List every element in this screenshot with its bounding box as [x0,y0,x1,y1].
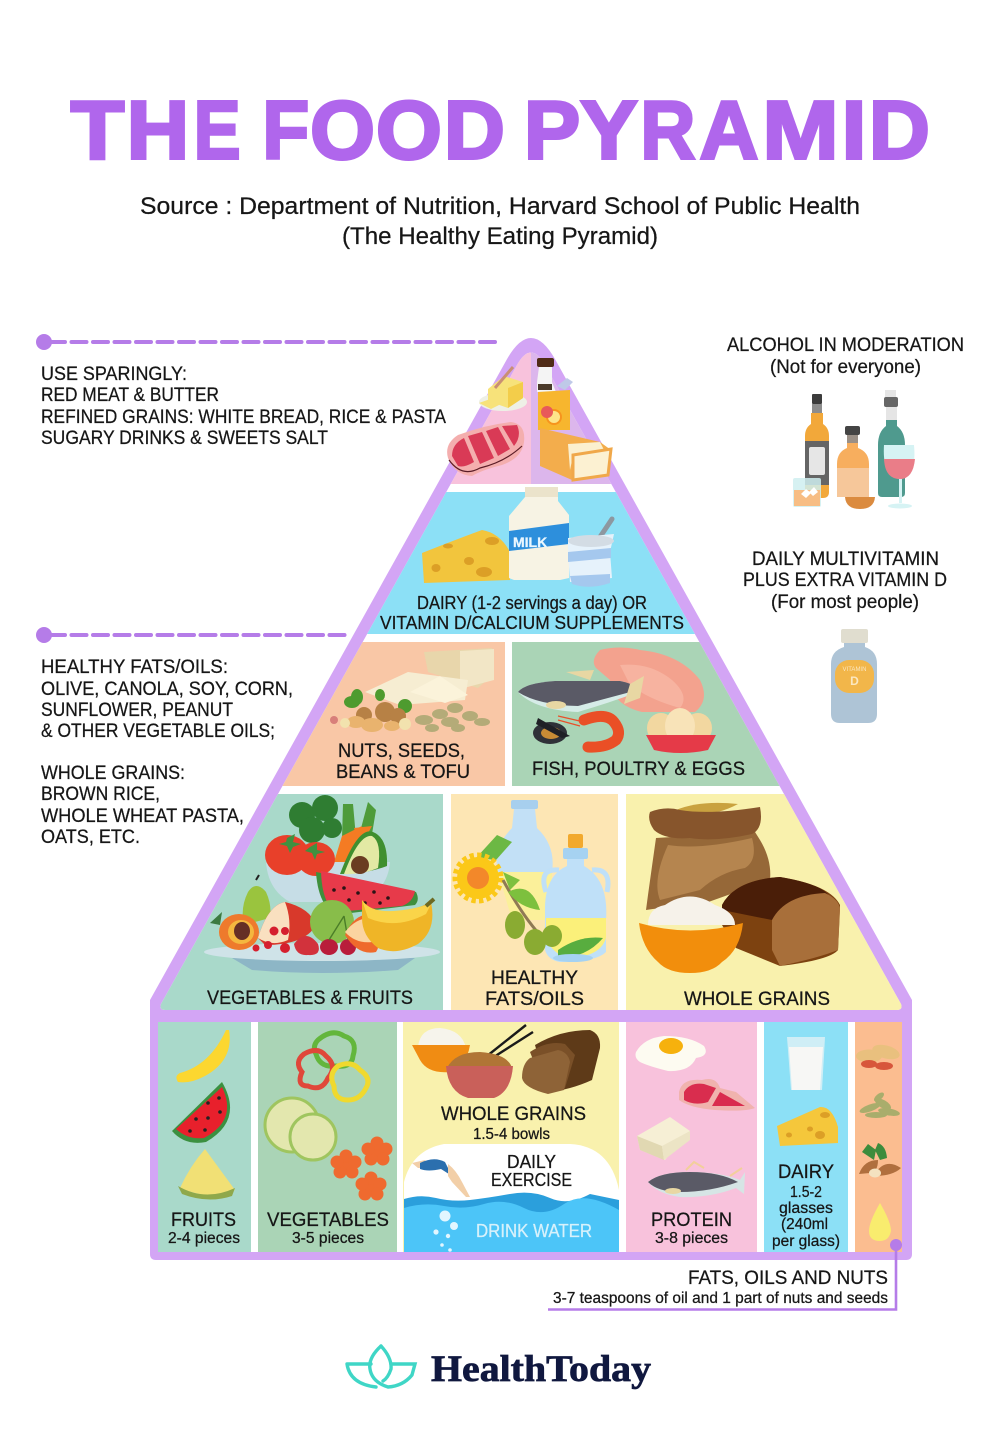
text block: healthy fats and oils: HEALTHY FATS/OILS: [41,656,228,678]
panel: whole grains [626,794,916,1010]
subtitle: source: Source : Department of Nutrition, Harvard School of Public Health [140,193,860,220]
icon: bowl of grains with chopsticks [446,1025,533,1098]
title: D [444,84,505,176]
text: drink water label: DRINK WATER [476,1221,592,1241]
icon: vitamin bottle: D [850,674,859,688]
text: vegetables label: VEGETABLES [267,1209,389,1231]
bottom tier white background [158,1022,902,1252]
icon: pineapple slice [178,1149,235,1200]
icon: sliced bell peppers [298,1033,368,1100]
icon: raw meat [679,1079,755,1111]
text block: use sparingly: REFINED GRAINS: WHITE BREAD, RICE & PASTA [41,406,446,428]
text block: healthy fats and oils [41,656,293,742]
illustration: bowl of vegetables [265,795,390,902]
icon: watermelon slice [172,1082,230,1143]
text block: whole grains [41,762,244,848]
illustration: raw steak [447,422,524,476]
panel: nuts, seeds, beans and tofu [270,642,505,786]
text block: whole grains: BROWN RICE, [41,783,160,805]
illustration: butter on a plate [479,367,527,411]
text block: use sparingly: SUGARY DRINKS & SWEETS SALT [41,427,328,449]
illustration: sunflower [457,835,512,899]
panel: whole grains servings [403,1022,619,1252]
text: fruits label: 2-4 pieces [168,1230,240,1247]
icon: almonds and leaves [859,1143,901,1178]
text: vegetables and fruits label: VEGETABLES & FRUITS [207,987,413,1009]
title: D [869,84,930,176]
text: whole grains label: WHOLE GRAINS [684,988,830,1010]
icon: carrot slices [330,1136,392,1200]
illustration: plate of fruits [204,871,440,973]
text: vegetables label: 3-5 pieces [292,1230,364,1247]
icon: fried egg [636,1036,706,1071]
text: dairy serving label: 1.5-2 [790,1184,822,1201]
icon: banana [176,1030,230,1082]
icon: cheese [777,1107,838,1146]
illustration: milk carton: MILK [513,534,547,550]
text: whole grains serving label: WHOLE GRAINS [441,1103,586,1125]
text block: daily multivitamin: PLUS EXTRA VITAMIN D [743,569,947,591]
callout line: healthy foods [36,627,345,643]
text: fruits label: FRUITS [171,1209,236,1231]
text block: whole grains: WHOLE GRAINS: [41,762,185,784]
text block: alcohol in moderation [727,334,964,378]
icon: bubbles [433,1210,458,1252]
icon: cucumber slices [265,1098,336,1160]
illustration: sliced white bread [540,428,611,480]
text block: daily multivitamin [743,548,947,613]
icon: alcohol bottles and glasses [793,390,915,509]
illustration: milk carton [509,487,569,580]
illustration: yogurt cup with spoon [568,519,614,587]
callout line: use sparingly [36,334,497,350]
text: healthy fats and oils label: FATS/OILS [485,988,584,1010]
text: nuts tier label: BEANS & TOFU [336,761,470,783]
illustration: daily exercise and water [404,1144,619,1252]
title: M [762,84,839,176]
callout: fats, oils and nuts connector [548,1239,902,1310]
text block: alcohol in moderation: (Not for everyone) [770,356,921,378]
icon: oil drop [869,1203,891,1241]
text: dairy serving label [772,1161,840,1250]
illustration: bowl of eggs [646,708,716,753]
text: fats, oils and nuts: FATS, OILS AND NUTS [688,1267,888,1289]
panel: fruits servings [158,1022,251,1252]
logo: lotus icon [347,1346,415,1387]
text block: daily multivitamin: DAILY MULTIVITAMIN [752,548,939,570]
title: A [700,84,758,176]
text: dairy serving label: glasses [779,1200,833,1217]
panel: dairy tier [360,492,705,634]
text block: use sparingly: RED MEAT & BUTTER [41,384,219,406]
illustration: olives and leaves [503,872,603,962]
text: nuts tier label: NUTS, SEEDS, [338,740,465,762]
text block: use sparingly: USE SPARINGLY: [41,363,187,385]
title: H [127,84,189,176]
panel: dairy servings [764,1022,848,1252]
illustration: oil jug [544,834,608,962]
icon: diver [412,1159,470,1197]
text: vegetables label [267,1209,389,1247]
text: nuts tier label [336,740,470,783]
text: daily exercise label [491,1152,572,1190]
panel: vegetables and fruits [150,794,443,1010]
text: fats, oils and nuts: 3-7 teaspoons of oil and 1 part of nuts and seeds [553,1290,888,1307]
illustration: salt bottle [537,358,556,392]
icon: vitamin bottle: VITAMIN [843,667,866,673]
illustration: grey fish [518,670,644,712]
icon: vitamin bottle [831,629,877,723]
title: O [310,84,375,176]
text block: whole grains: OATS, ETC. [41,826,140,848]
text block: daily multivitamin: (For most people) [771,591,919,613]
icon: seeds [858,1091,900,1118]
text: dairy serving label: (240ml [781,1216,828,1233]
panel: fats and nuts servings [855,1022,902,1252]
illustration: oil bottle [497,800,553,920]
text block: alcohol in moderation: ALCOHOL IN MODERATION [727,334,964,356]
text: protein label: PROTEIN [651,1209,732,1231]
text: protein label: 3-8 pieces [655,1230,728,1247]
text: protein label [651,1209,732,1247]
pyramid outline [150,338,912,1260]
text block: healthy fats and oils: OLIVE, CANOLA, SOY, CORN, [41,678,293,700]
text: fats, oils and nuts [553,1267,888,1307]
title: T [71,84,124,176]
title: R [640,84,695,176]
panel: top tier, use sparingly [450,352,611,484]
text: fruits label [168,1209,240,1247]
text: daily exercise label: DAILY [507,1152,556,1172]
subtitle: source [140,193,860,250]
text: dairy serving label: per glass) [772,1233,840,1250]
pyramid inner background [160,352,902,1010]
text block: whole grains: WHOLE WHEAT PASTA, [41,805,244,827]
text: healthy fats and oils label [485,967,584,1010]
title: E [194,84,241,176]
illustration: mussel [533,718,570,744]
illustration: juice box [538,378,573,430]
illustration: cheese wedge [422,530,510,583]
subtitle: source: (The Healthy Eating Pyramid) [342,223,658,250]
text block: use sparingly [41,363,446,449]
text: dairy tier label [380,592,684,633]
icon: bowl of rice [412,1028,470,1072]
title: P [524,84,580,176]
text: dairy tier label: VITAMIN D/CALCIUM SUPPLEMENTS [380,612,684,633]
illustration: shrimp [558,716,619,747]
panel: protein servings [626,1022,757,1252]
title: Y [580,84,638,176]
title: F [262,84,309,176]
panel: healthy fats and oils [451,794,618,1010]
icon: glass of milk [787,1037,825,1090]
text: whole grains serving label: 1.5-4 bowls [473,1126,550,1143]
text: fish tier label: FISH, POULTRY & EGGS [532,758,745,780]
icon: peanuts [856,1042,901,1070]
title: O [376,84,442,176]
illustration: grain sack [646,803,770,910]
icon: tofu [637,1117,690,1160]
panel: vegetables servings [258,1022,397,1252]
text: daily exercise label: EXERCISE [491,1170,572,1190]
illustration: brown loaf [722,877,840,966]
title: I [842,84,866,176]
panel: fish, poultry and eggs [512,642,792,786]
illustration: bowl of rice [639,896,743,973]
icon: sliced dark bread [522,1030,600,1094]
text: healthy fats and oils label: HEALTHY [491,967,578,989]
icon: fish [648,1162,745,1197]
text: dairy tier label: DAIRY (1-2 servings a day) OR [417,592,647,613]
text: whole grains serving label [441,1103,586,1143]
illustration: nuts and seeds [330,689,490,732]
text block: healthy fats and oils: SUNFLOWER, PEANUT [41,699,233,721]
illustration: raw chicken [594,648,704,712]
logo: HealthToday wordmark: HealthToday [431,1349,652,1390]
text block: healthy fats and oils: & OTHER VEGETABLE OILS; [41,720,275,742]
illustration: tofu blocks [365,648,494,705]
text: dairy serving label: DAIRY [778,1161,834,1183]
